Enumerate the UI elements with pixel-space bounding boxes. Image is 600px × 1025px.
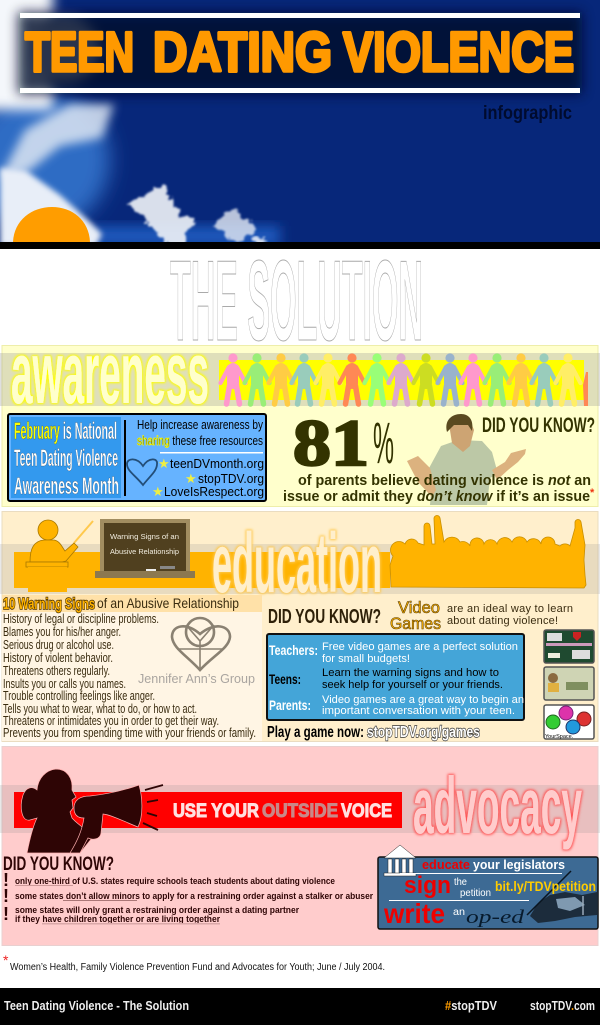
game thumbnails: YourSpace. bbox=[545, 734, 574, 740]
list items: Tells you what to wear, what to do, or how to act. bbox=[3, 702, 197, 716]
facts list: ! bbox=[3, 904, 9, 924]
list items: Insults you or calls you names. bbox=[3, 677, 126, 691]
teachers row: Free video games are a perfect solution bbox=[322, 641, 518, 653]
stat description: * bbox=[590, 487, 595, 499]
sign line bbox=[404, 872, 596, 899]
icon: teacher at podium bbox=[26, 520, 93, 592]
footnote bbox=[3, 952, 385, 973]
infographic label: infographic bbox=[483, 103, 572, 124]
list heading: 10 Warning Signs bbox=[3, 596, 95, 613]
slogan: use your outside voice: USE YOUR bbox=[173, 801, 259, 822]
callout: awareness month: February is National bbox=[14, 418, 117, 445]
footnote: * bbox=[3, 952, 9, 968]
callout: awareness month: stopTDV.org bbox=[198, 472, 264, 486]
list items: History of violent behavior. bbox=[3, 651, 113, 665]
teachers row: Teachers: bbox=[269, 642, 318, 658]
list items: Serious drug or alcohol use. bbox=[3, 638, 114, 652]
teens row bbox=[269, 667, 503, 691]
panel: advocacy bbox=[0, 746, 600, 1025]
list items: Threatens or intimidates you in order to get their way. bbox=[3, 714, 219, 728]
educate line: your legislators bbox=[473, 857, 565, 872]
list items: Trouble controlling feelings like anger. bbox=[3, 689, 155, 703]
write line: write bbox=[383, 898, 445, 929]
facts list: only one-third of U.S. states require schools teach students about dating violence bbox=[15, 876, 335, 886]
callout: awareness month: Teen Dating Violence bbox=[14, 445, 118, 472]
callout: take action bbox=[378, 845, 598, 929]
stat: 81 percent: 81 bbox=[293, 407, 369, 480]
panel: education bbox=[0, 512, 600, 742]
slogan: use your outside voice bbox=[173, 801, 392, 822]
facts list: some states will only grant a restraining order against a dating partner bbox=[15, 905, 299, 915]
list items: Threatens others regularly. bbox=[3, 664, 110, 678]
panel: awareness bbox=[0, 323, 600, 506]
callout: awareness month: Awareness Month bbox=[14, 473, 119, 500]
illustration: hand writing bbox=[527, 871, 597, 923]
video games callout: about dating violence! bbox=[447, 615, 558, 627]
callout: awareness month bbox=[8, 414, 266, 501]
footer bar: Teen Dating Violence - The Solution bbox=[4, 998, 189, 1013]
slogan: use your outside voice: OUTSIDE bbox=[262, 801, 338, 822]
list heading: of an Abusive Relationship bbox=[97, 595, 239, 611]
chalkboard bbox=[95, 519, 195, 578]
teens row: Learn the warning signs and how to bbox=[322, 667, 499, 679]
callout: awareness month: Help increase awareness by bbox=[137, 417, 263, 432]
video games callout: Games bbox=[390, 614, 441, 633]
panel: awareness: % bbox=[373, 411, 394, 476]
sign line: the bbox=[454, 877, 467, 888]
teens row: Teens: bbox=[269, 671, 301, 687]
panel: teachers, teens, parents bbox=[267, 634, 524, 720]
chalkboard: Warning Signs of an bbox=[110, 532, 179, 541]
callout: awareness month: ★ bbox=[152, 484, 164, 499]
stat: 81 percent bbox=[293, 407, 394, 480]
play a game link: stopTDV.org/games bbox=[367, 724, 480, 741]
icon: girl with megaphone bbox=[21, 769, 163, 853]
panel: awareness: awareness bbox=[11, 323, 209, 422]
title block bbox=[18, 12, 582, 94]
warning signs list bbox=[2, 595, 262, 741]
teachers row: for small budgets! bbox=[322, 653, 410, 665]
play a game link bbox=[267, 724, 480, 741]
callout: awareness month: sharing these free resources bbox=[137, 433, 263, 448]
write line bbox=[383, 898, 525, 929]
chalkboard: Abusive Relationship bbox=[110, 547, 179, 556]
did you know heading: DID YOU KNOW? bbox=[3, 854, 114, 875]
teachers row bbox=[269, 641, 518, 665]
facts list bbox=[3, 870, 373, 924]
callout: awareness month: teenDVmonth.org bbox=[170, 457, 264, 471]
did you know heading: DID YOU KNOW? bbox=[268, 606, 381, 628]
play a game link: Play a game now: bbox=[267, 724, 364, 741]
illustration: shrugging man bbox=[407, 414, 526, 505]
logo: Jennifer Ann's Group: Jennifer Ann’s Group bbox=[138, 672, 255, 686]
parents row: important conversation with your teen. bbox=[322, 705, 515, 717]
parents row bbox=[269, 694, 524, 717]
callout: awareness month: ★ bbox=[158, 456, 170, 471]
header banner bbox=[0, 0, 600, 249]
footnote: Women’s Health, Family Violence Prevention Fund and Advocates for Youth; June / July 2004. bbox=[10, 962, 385, 973]
logo: Jennifer Ann's Group bbox=[138, 618, 255, 686]
footer bar bbox=[0, 988, 600, 1025]
list items: Prevents you from spending time with your friends or family. bbox=[3, 726, 256, 740]
row of paper-chain people bbox=[219, 353, 588, 406]
write line: an bbox=[453, 907, 465, 918]
icon: government building bbox=[384, 845, 416, 876]
sun bbox=[13, 207, 90, 242]
footer bar: stopTDV.com bbox=[530, 998, 595, 1013]
facts list: ! bbox=[3, 870, 9, 890]
stat description: issue or admit they don’t know if it’s an issue bbox=[283, 489, 590, 505]
video games callout: Video bbox=[398, 598, 440, 617]
list items: Blames you for his/her anger. bbox=[3, 625, 121, 639]
facts list: some states don’t allow minors to apply for a restraining order against a stalker or abuser bbox=[15, 891, 373, 901]
list heading bbox=[3, 595, 239, 613]
panel: education: education bbox=[212, 516, 382, 610]
slogan: use your outside voice: VOICE bbox=[341, 801, 392, 822]
stat description bbox=[283, 473, 595, 505]
video games callout: are an ideal way to learn bbox=[447, 603, 573, 615]
video games callout bbox=[390, 598, 573, 633]
list items: History of legal or discipline problems. bbox=[3, 612, 159, 626]
stat description: of parents believe dating violence is not an bbox=[298, 473, 591, 489]
sign line: petition bbox=[460, 888, 491, 899]
sign line: sign bbox=[404, 872, 451, 899]
icon: heart bbox=[127, 459, 157, 485]
callout: awareness month: ★ bbox=[185, 471, 197, 486]
callout: awareness month: LoveIsRespect.org bbox=[164, 485, 264, 499]
list items bbox=[3, 612, 256, 740]
footer bar: #stopTDV bbox=[445, 998, 497, 1013]
icon: raised-hands crowd bbox=[390, 515, 586, 588]
title block: DATING bbox=[153, 20, 332, 83]
game thumbnails bbox=[544, 630, 594, 740]
title block: TEEN bbox=[25, 20, 134, 83]
write line: op-ed bbox=[466, 907, 525, 928]
educate line: educate bbox=[422, 857, 470, 872]
facts list: ! bbox=[3, 886, 9, 906]
parents row: Video games are a great way to begin an bbox=[322, 694, 524, 706]
facts list: if they have children together or are living together bbox=[15, 914, 220, 924]
parents row: Parents: bbox=[269, 697, 311, 713]
educate line bbox=[422, 857, 565, 872]
teens row: seek help for yourself or your friends. bbox=[322, 679, 503, 691]
